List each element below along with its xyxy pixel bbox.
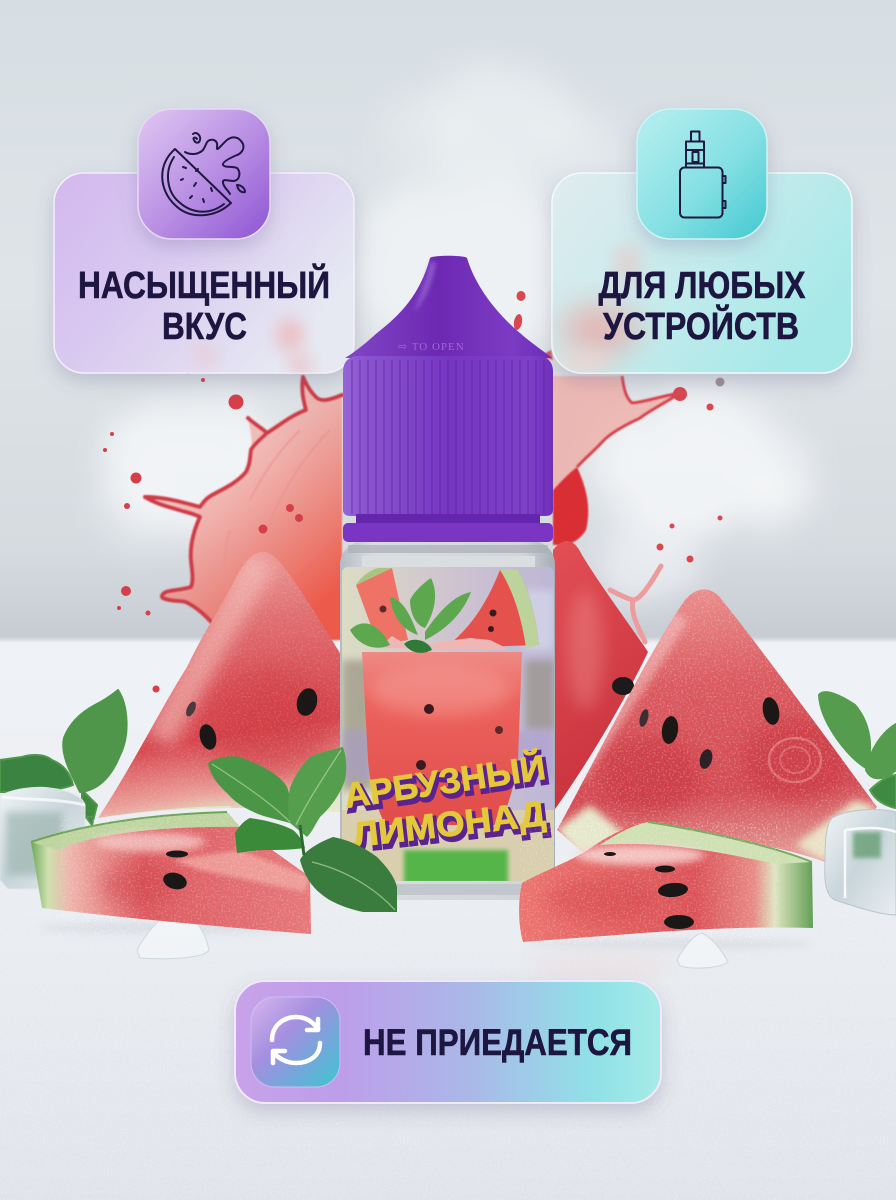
- mint sprig right: [819, 692, 896, 808]
- card heading: ВКУС: [162, 306, 247, 348]
- watermelon wedge back left: [98, 552, 343, 820]
- cap highlight: [414, 262, 436, 312]
- bottle cap nozzle: [345, 256, 552, 358]
- product bottle: [340, 256, 555, 900]
- seeds: [294, 686, 320, 718]
- benefit pill: [235, 981, 661, 1103]
- table shadows: [40, 922, 815, 949]
- label product name: ЛИМОНАД: [350, 794, 548, 855]
- ribbed cap: [343, 356, 553, 516]
- label watermelon slices: [356, 568, 408, 645]
- splash trail right: [610, 566, 661, 642]
- card heading: НАСЫЩЕННЫЙ: [78, 262, 330, 307]
- watermelon slice front left: [31, 812, 311, 935]
- icon tile: vape device: [637, 109, 767, 239]
- ice shard front left: [137, 908, 209, 959]
- cap collar: [356, 514, 540, 524]
- red splash right: [540, 350, 680, 545]
- watermelon slice front right: [519, 822, 813, 944]
- glass body: [340, 542, 555, 900]
- label green base: [404, 850, 508, 884]
- label mint: [350, 578, 471, 648]
- card heading: УСТРОЙСТВ: [603, 303, 799, 348]
- label product name: АРБУЗНЫЙ: [341, 747, 548, 816]
- seeds: [760, 696, 782, 726]
- background wall: [0, 0, 896, 645]
- water speckle on table: [0, 900, 896, 1200]
- watermelon wedge back right: [557, 590, 877, 862]
- ice cube right: [825, 810, 896, 915]
- pill icon tile: refresh arrows: [251, 997, 340, 1087]
- seeds: [161, 870, 189, 892]
- bottle label artwork: [342, 567, 555, 884]
- smoke clouds: [95, 65, 815, 602]
- watermelon wedge centre right: [553, 541, 648, 812]
- cap embossed text: ⇨ TO OPEN: [398, 341, 465, 353]
- red splash left: [145, 377, 342, 640]
- pill text: НЕ ПРИЕДАЕТСЯ: [363, 1022, 632, 1063]
- splash droplets left: [103, 370, 303, 692]
- feature card: rich taste: [54, 173, 354, 377]
- label product name: ЛИМОНАД: [353, 798, 550, 859]
- seeds: [657, 882, 689, 898]
- icon tile: watermelon splash: [138, 109, 270, 239]
- label drink glass: [362, 652, 522, 825]
- splash droplets right: [513, 291, 724, 562]
- ice cube left: [0, 787, 85, 889]
- label product name: [341, 747, 551, 859]
- label lower band: [342, 810, 554, 881]
- pink reflection on table: [530, 956, 670, 976]
- label product name: АРБУЗНЫЙ: [344, 751, 551, 820]
- table surface: [0, 640, 896, 1200]
- feature card: any devices: [552, 173, 852, 374]
- ice shard front right: [677, 933, 728, 968]
- card heading: ДЛЯ ЛЮБЫХ: [598, 265, 806, 307]
- mint sprig left: [0, 690, 127, 825]
- mint sprig centre: [208, 747, 397, 912]
